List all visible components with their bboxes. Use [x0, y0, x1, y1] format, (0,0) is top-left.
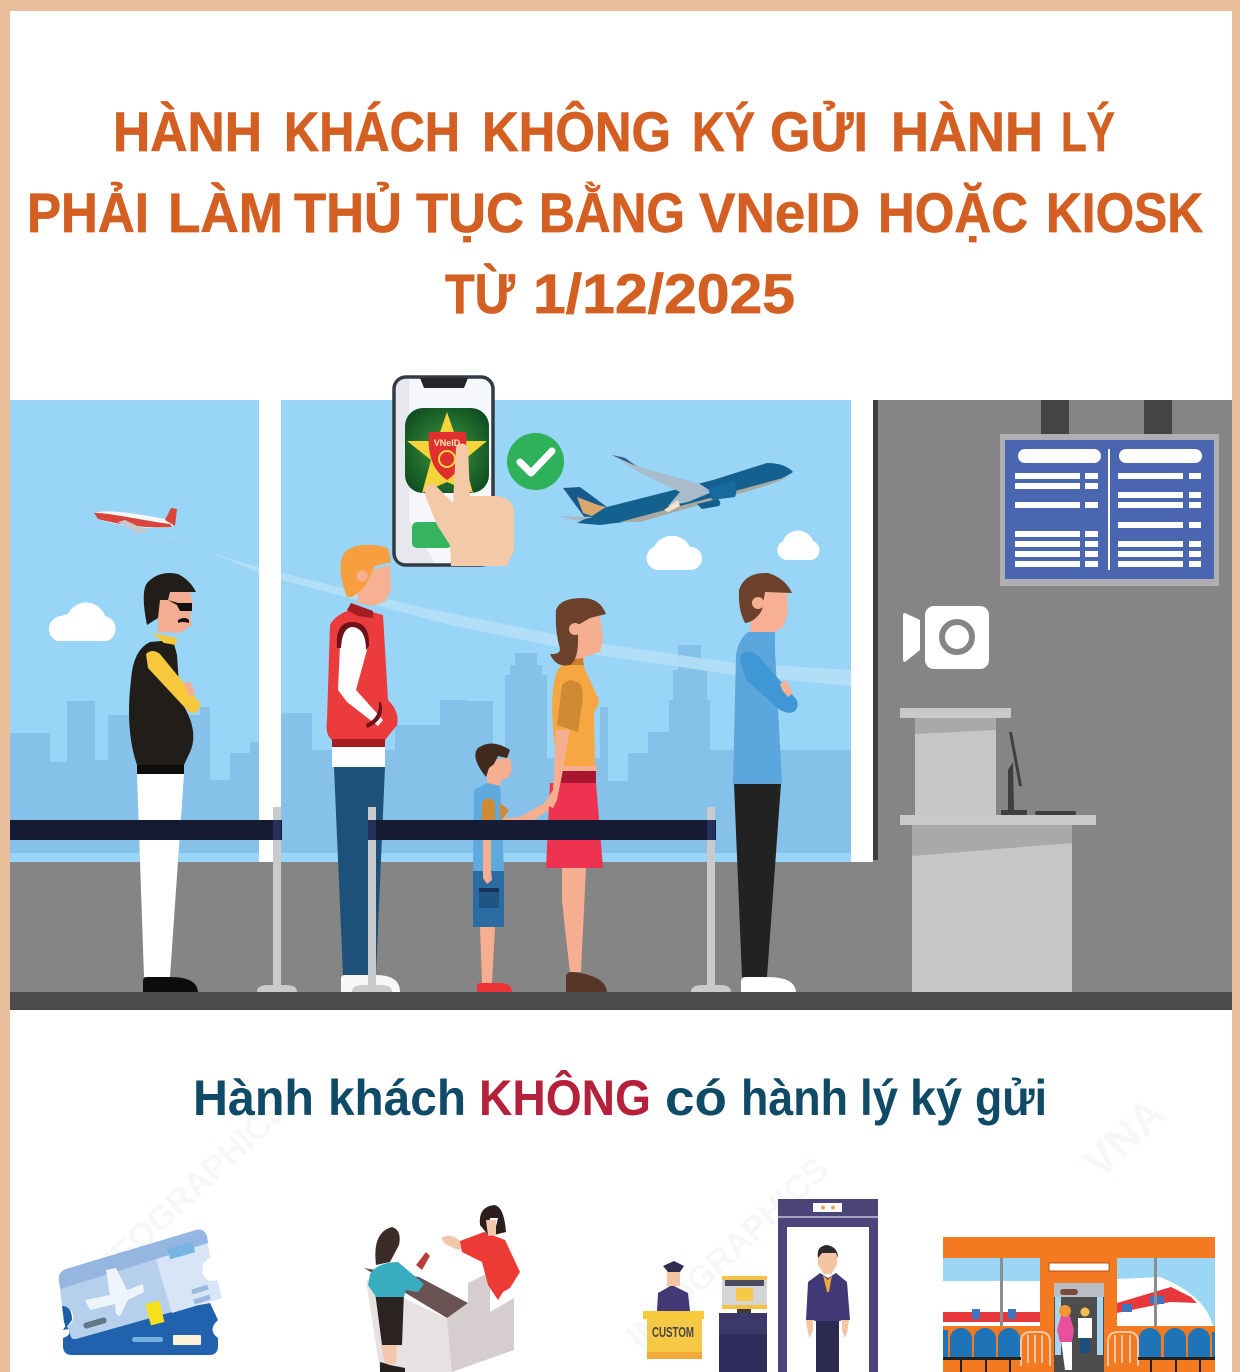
window sky: [10, 400, 855, 870]
title: LÝ: [1061, 100, 1115, 163]
subheading: [193, 1069, 1047, 1126]
icon: airport security checkpoint: [643, 1199, 878, 1372]
icon: check-in counter: [364, 1205, 520, 1372]
subheading: KHÔNG: [479, 1069, 651, 1126]
title: 1/12/2025: [533, 262, 795, 325]
title: THỦ: [294, 181, 402, 244]
watermark: VNA: [1073, 1088, 1175, 1187]
title: HOẶC: [878, 181, 1028, 244]
subheading: lý: [860, 1070, 898, 1126]
flight board: [1000, 400, 1219, 586]
phone with VNeID app: [394, 377, 493, 565]
title: TỤC: [416, 181, 524, 244]
subheading: có: [665, 1070, 727, 1126]
title: BẰNG: [539, 181, 685, 244]
title: GỬI: [770, 100, 868, 163]
title: HÀNH: [113, 100, 262, 163]
subheading: hành: [741, 1070, 848, 1126]
watermark: INFOGRAPHICS: [620, 1150, 836, 1356]
small red airplane: [94, 508, 177, 533]
window mullions: [259, 400, 281, 862]
title: KÝ: [692, 100, 755, 163]
subheading: gửi: [975, 1070, 1047, 1126]
vapour trail: [158, 532, 851, 686]
title: KHÔNG: [482, 100, 671, 163]
icon: train station: [943, 1237, 1215, 1372]
scanner kiosk: [719, 1276, 767, 1372]
officer in gate: [806, 1245, 850, 1372]
Vietnam Airlines plane: [557, 455, 793, 525]
clouds: [49, 531, 819, 641]
grey wall: [873, 400, 1232, 992]
passenger 4: woman: [545, 598, 607, 992]
subheading: ký: [910, 1070, 962, 1126]
queue ropes: [10, 820, 716, 840]
airport scene: [10, 377, 1232, 1010]
passenger 1: man with glasses: [129, 573, 200, 992]
subheading: Hành: [193, 1070, 314, 1126]
city skyline: [10, 645, 851, 853]
customs desk: [643, 1261, 704, 1359]
security camera icon: [903, 606, 989, 669]
app icon: VNeID: [434, 438, 461, 448]
title: HÀNH: [891, 100, 1043, 163]
check mark badge: [507, 433, 564, 490]
subheading: khách: [328, 1070, 466, 1126]
title: PHẢI: [27, 181, 149, 244]
title: KHÁCH: [284, 100, 460, 163]
title: LÀM: [168, 181, 283, 244]
customer: [368, 1227, 430, 1372]
customs desk: CUSTOM: [652, 1324, 694, 1341]
floor: [10, 862, 880, 992]
watermark: [80, 1088, 1175, 1356]
passenger 2: man in red vest: [327, 545, 400, 992]
stanchion posts: [257, 807, 731, 992]
title: TỪ: [445, 262, 515, 325]
title: VNeID: [699, 181, 860, 244]
kiosk counter: [900, 708, 1096, 992]
title: [27, 100, 1203, 325]
watermark: INFOGRAPHICS: [80, 1090, 296, 1296]
title: KIOSK: [1046, 181, 1203, 244]
attendant: [441, 1205, 520, 1300]
passenger 5: man in blue: [733, 573, 798, 992]
hand tapping phone: [425, 444, 514, 566]
travellers: [1057, 1305, 1092, 1370]
app icon: [405, 408, 489, 493]
passenger 3: boy: [473, 743, 552, 992]
icon: boarding tickets: [59, 1230, 222, 1355]
